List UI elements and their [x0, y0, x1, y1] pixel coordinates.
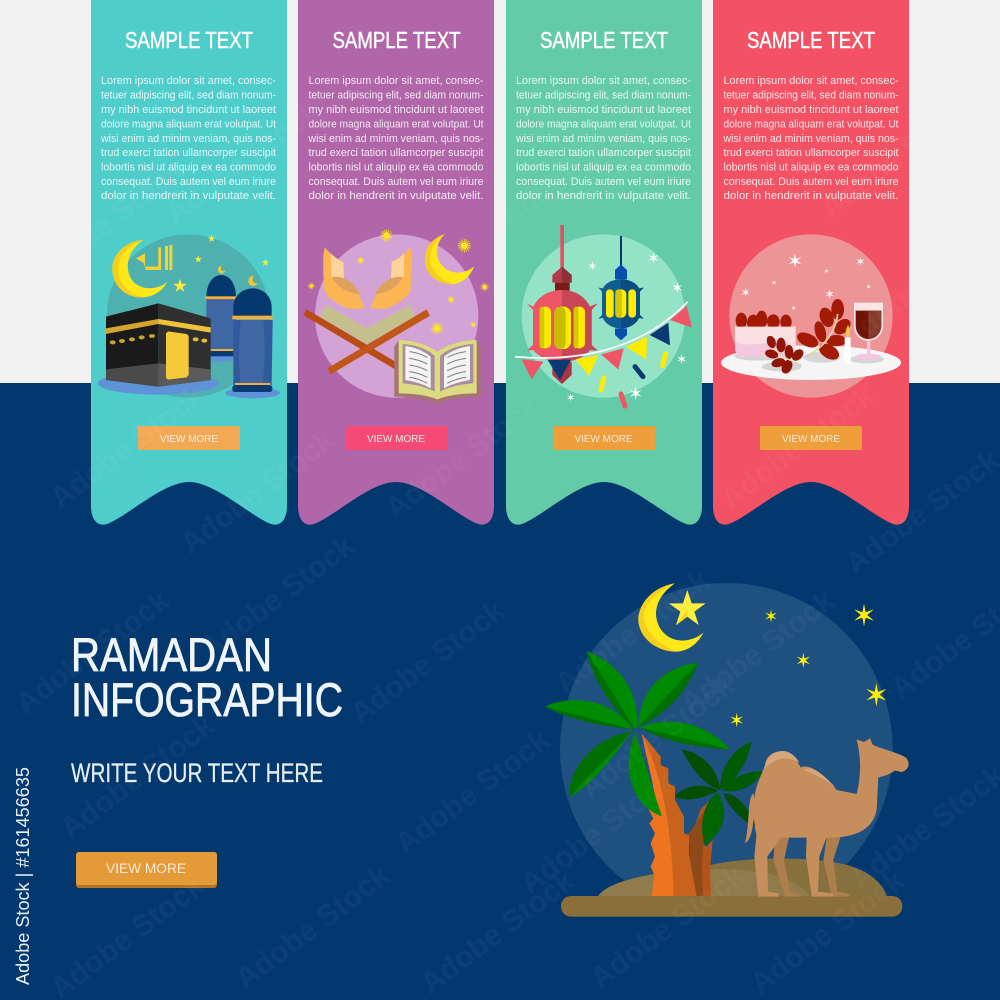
text block 2 — [308, 75, 484, 202]
heading 4: SAMPLE TEXT — [747, 27, 875, 53]
text block 3: dolore magna aliquam erat volutpat. Ut — [516, 118, 691, 130]
text block 2: Lorem ipsum dolor sit amet, consec- — [308, 75, 484, 87]
panel: quran — [298, 0, 494, 525]
main button — [76, 852, 217, 888]
icon: lanterns and bunting — [515, 225, 692, 406]
text block 1: dolor in hendrerit in vulputate velit. — [101, 190, 276, 202]
text block 4: Lorem ipsum dolor sit amet, consec- — [724, 75, 899, 87]
text block 1 — [100, 75, 276, 202]
text block 2: dolor in hendrerit in vulputate velit. — [308, 190, 484, 202]
text block 3: wisi enim ad minim veniam, quis nos- — [515, 133, 691, 145]
heading 3: SAMPLE TEXT — [540, 27, 668, 53]
text block 2: my nibh euismod tincidunt ut laoreet — [308, 104, 484, 116]
icon: praying hands and quran — [303, 229, 489, 403]
subtitle: WRITE YOUR TEXT HERE — [71, 758, 323, 788]
text block 4: wisi enim ad minim veniam, quis nos- — [723, 133, 899, 145]
icon: dates and drink — [721, 234, 901, 398]
text block 2: wisi enim ad minim veniam, quis nos- — [308, 133, 484, 145]
title — [71, 628, 343, 726]
watermark: Adobe Stock — [229, 859, 396, 996]
heading 1: SAMPLE TEXT — [125, 27, 253, 53]
background bottom — [0, 383, 1000, 1000]
button 3: VIEW MORE — [574, 433, 632, 445]
text block 4: tetuer adipiscing elit, sed diam nonum- — [724, 90, 899, 102]
button 1: VIEW MORE — [160, 433, 218, 445]
ribbon 4 — [713, 0, 909, 525]
text block 2: dolore magna aliquam erat volutpat. Ut — [308, 118, 484, 130]
button 3 — [553, 426, 655, 450]
text block 1: my nibh euismod tincidunt ut laoreet — [101, 104, 276, 116]
ribbon 1 — [91, 0, 287, 525]
watermark: Adobe Stock — [514, 764, 681, 901]
ribbon 3 — [506, 0, 702, 525]
main button: VIEW MORE — [106, 860, 186, 876]
text block 4: dolor in hendrerit in vulputate velit. — [724, 190, 898, 202]
text block 1: trud exerci tation ullamcorper suscipit — [101, 147, 276, 159]
watermark: Adobe Stock — [414, 864, 581, 1000]
watermark: Adobe Stock — [24, 154, 191, 291]
ribbon 2 — [298, 0, 494, 525]
panel: lanterns — [506, 0, 702, 525]
watermark: Adobe Stock — [159, 94, 326, 231]
watermark: Adobe Stock — [389, 724, 556, 861]
text block 2: tetuer adipiscing elit, sed diam nonum- — [308, 90, 484, 102]
watermark: Adobe Stock — [574, 669, 741, 806]
text block 4: consequat. Duis autem vel eum iriure — [724, 176, 898, 188]
text block 3: trud exerci tation ullamcorper suscipit — [516, 147, 691, 159]
text block 4: my nibh euismod tincidunt ut laoreet — [724, 104, 898, 116]
text block 2: consequat. Duis autem vel eum iriure — [308, 176, 484, 188]
watermark: Adobe Stock — [584, 859, 751, 996]
illustration: camel and palms at night — [545, 583, 909, 917]
background top — [0, 0, 1000, 383]
button 1 — [138, 426, 240, 450]
title: RAMADAN — [71, 628, 272, 681]
watermark: Adobe Stock — [494, 99, 661, 236]
watermark: Adobe Stock — [379, 389, 546, 526]
panel: kaaba — [91, 0, 287, 525]
text block 3: tetuer adipiscing elit, sed diam nonum- — [516, 90, 691, 102]
watermark: Adobe Stock — [814, 89, 981, 226]
text block 3: my nibh euismod tincidunt ut laoreet — [516, 104, 691, 116]
text block 1: consequat. Duis autem vel eum iriure — [101, 176, 276, 188]
text block 2: trud exerci tation ullamcorper suscipit — [308, 147, 484, 159]
title: INFOGRAPHIC — [71, 673, 343, 726]
text block 1: dolore magna aliquam erat volutpat. Ut — [101, 118, 276, 130]
watermark: Adobe Stock — [344, 594, 511, 731]
watermark: Adobe Stock — [174, 424, 341, 561]
text block 1: tetuer adipiscing elit, sed diam nonum- — [101, 90, 276, 102]
watermark: Adobe Stock — [54, 709, 221, 846]
watermark: Adobe Stock — [714, 379, 881, 516]
text block 3: consequat. Duis autem vel eum iriure — [516, 176, 691, 188]
text block 1: wisi enim ad minim veniam, quis nos- — [100, 133, 276, 145]
text block 3 — [515, 75, 691, 202]
watermark: Adobe Stock — [194, 529, 361, 666]
button 4 — [760, 426, 862, 450]
button 4: VIEW MORE — [782, 433, 840, 445]
text block 4: trud exerci tation ullamcorper suscipit — [724, 147, 898, 159]
icon: kaaba and minarets — [98, 234, 280, 398]
text block 3: dolor in hendrerit in vulputate velit. — [516, 190, 691, 202]
watermark: Adobe Stock — [9, 584, 176, 721]
button 2 — [346, 426, 448, 450]
watermark: Adobe Stock — [674, 584, 841, 721]
heading 2: SAMPLE TEXT — [332, 27, 460, 53]
watermark: Adobe Stock — [549, 564, 716, 701]
text block 4 — [723, 75, 899, 202]
text block 2: lobortis nisl ut aliquip ex ea commodo — [308, 162, 484, 174]
button 2: VIEW MORE — [367, 433, 425, 445]
text block 4: lobortis nisl ut aliquip ex ea commodo — [724, 162, 898, 174]
watermark: Adobe Stock — [834, 219, 1000, 356]
text block 3: Lorem ipsum dolor sit amet, consec- — [516, 75, 691, 87]
panel: dates — [713, 0, 909, 525]
watermark: Adobe Stock — [44, 379, 211, 516]
text block 3: lobortis nisl ut aliquip ex ea commodo — [516, 162, 691, 174]
text block 4: dolore magna aliquam erat volutpat. Ut — [724, 118, 898, 130]
text block 1: Lorem ipsum dolor sit amet, consec- — [101, 75, 276, 87]
text block 1: lobortis nisl ut aliquip ex ea commodo — [101, 162, 276, 174]
watermark: Adobe Stock — [744, 864, 911, 1000]
vertical stock id: Adobe Stock | #161456635 — [13, 767, 33, 985]
